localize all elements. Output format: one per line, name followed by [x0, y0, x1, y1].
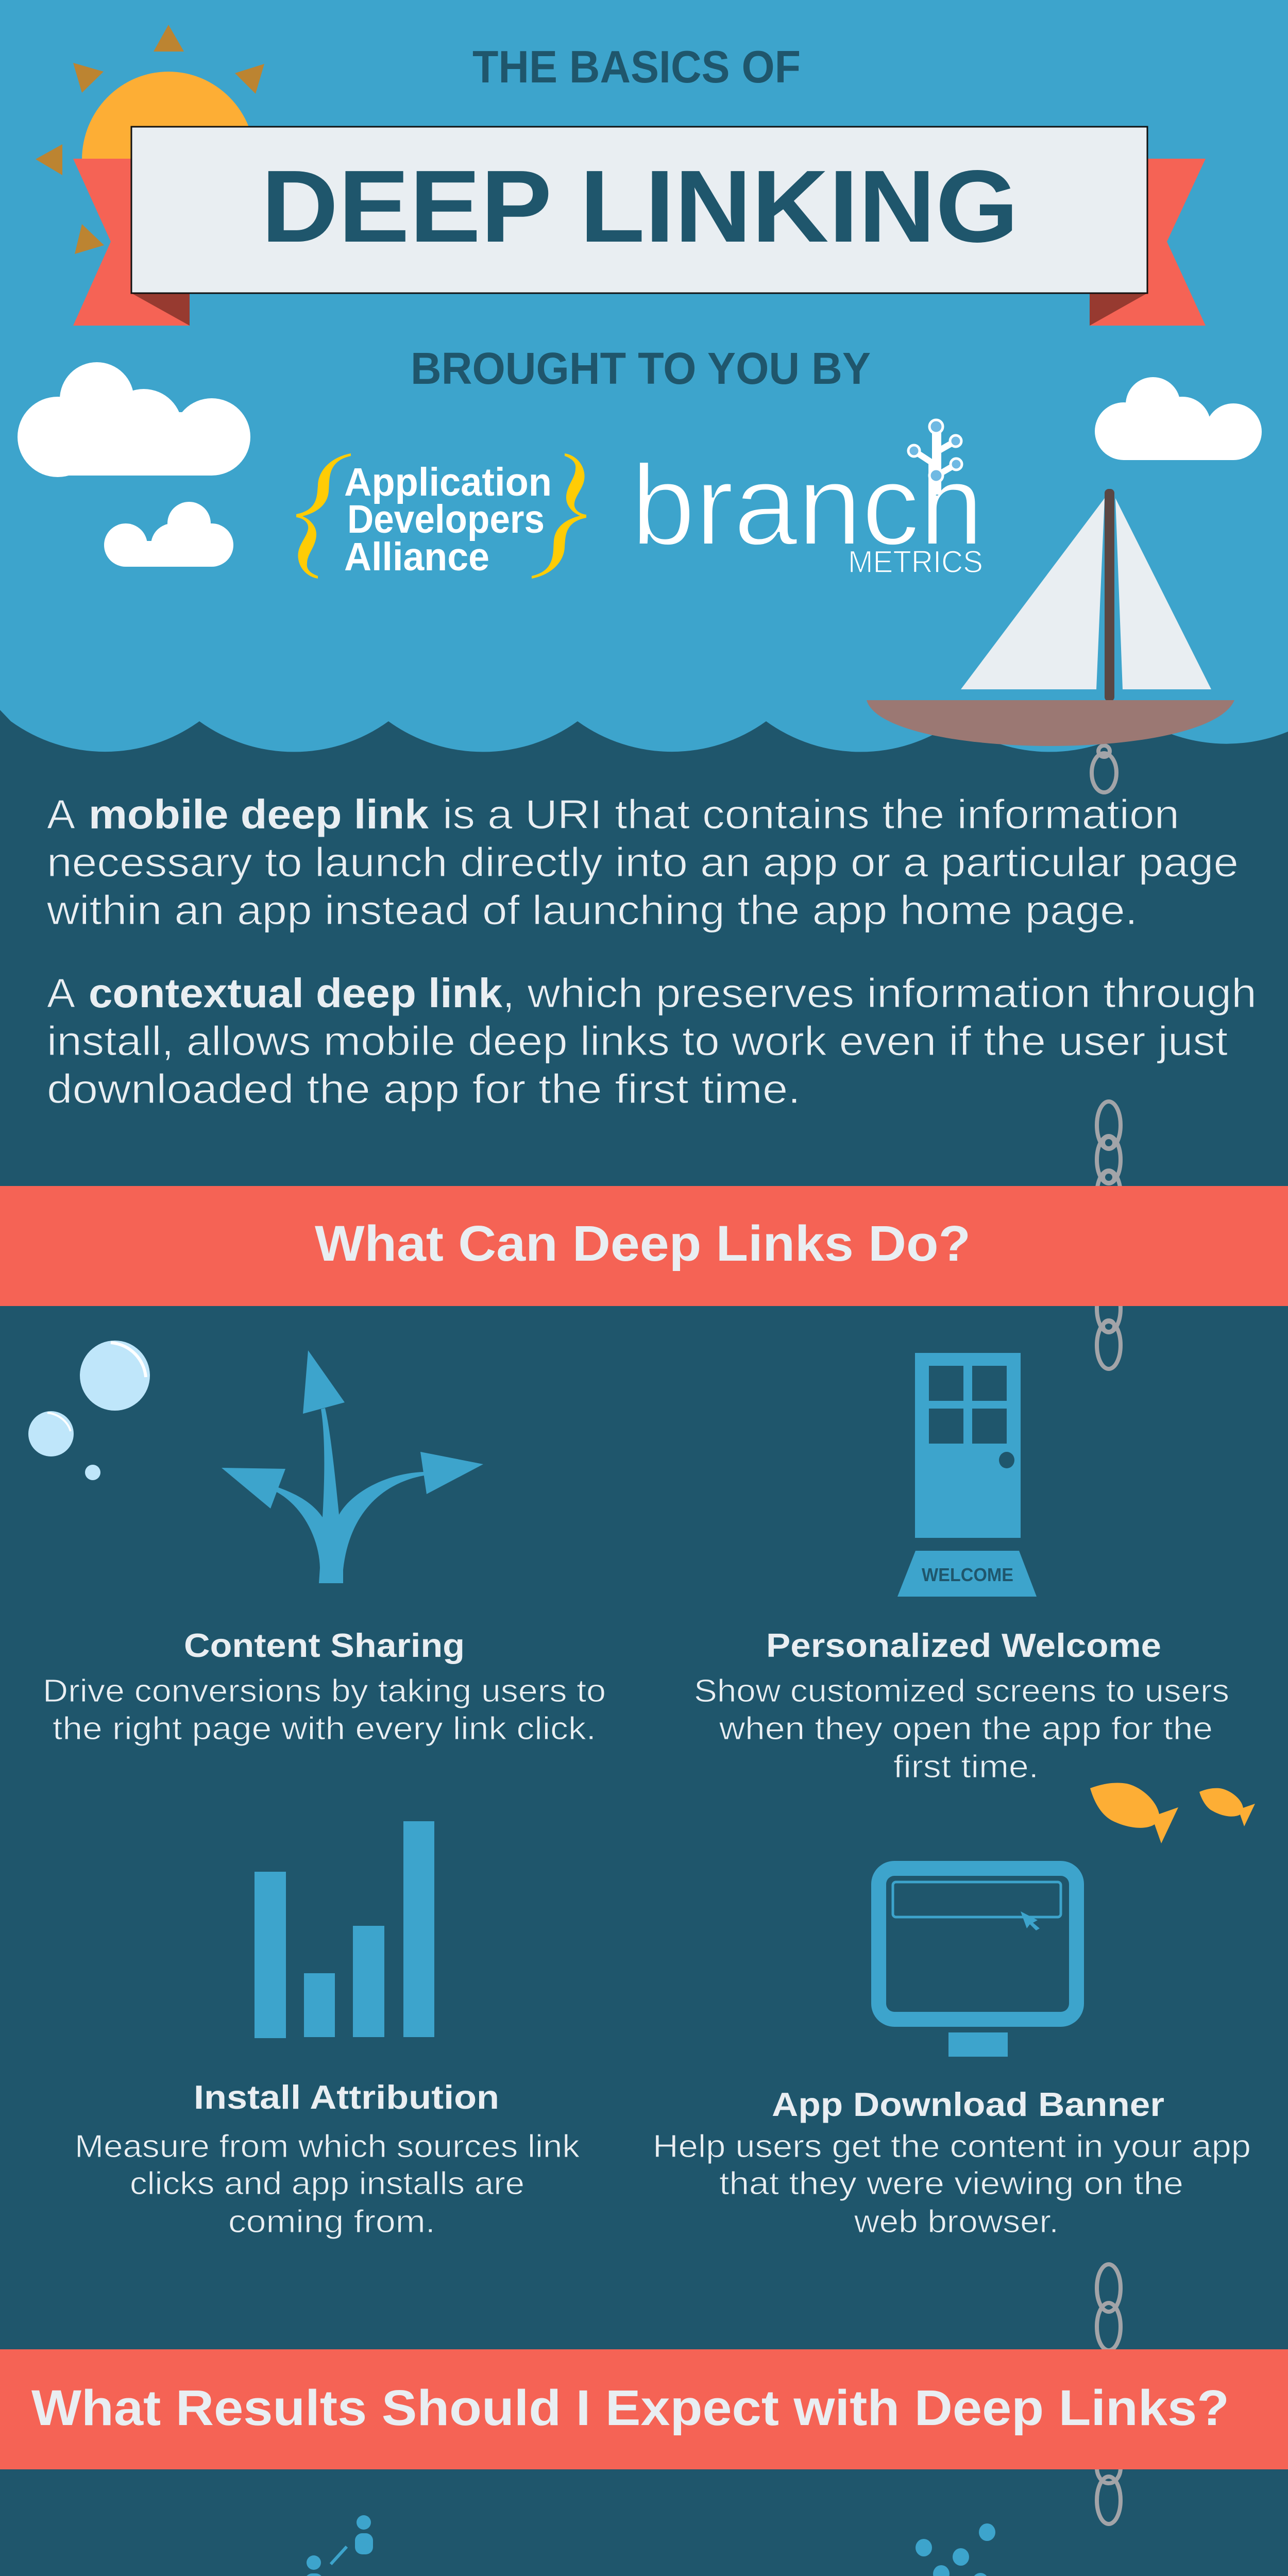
feature: app download banner [653, 2086, 1251, 2240]
cloud: small left [104, 502, 233, 567]
intro text block [46, 791, 1257, 1112]
feature: content sharing [43, 1626, 606, 1747]
cloud: right [1095, 377, 1262, 460]
logo: branch metrics: branch [631, 442, 984, 569]
feature: content sharing: Content Sharing [184, 1626, 465, 1664]
feature: install attribution: Install Attribution [194, 2078, 499, 2116]
intro text block: mobile deep link [89, 791, 429, 837]
feature: content sharing: Drive conversions by taking users to [43, 1673, 606, 1709]
heading: the basics of: THE BASICS OF [472, 41, 801, 92]
feature: personalized welcome: first time. [893, 1749, 1039, 1785]
intro text block: necessary to launch directly into an app or a particular page [47, 839, 1239, 885]
intro text block: A [47, 791, 76, 837]
icon: cup with dollar and bubbles [909, 2523, 1012, 2576]
feature: app download banner: that they were viewing on the [719, 2166, 1183, 2201]
heading: brought to you by: BROUGHT TO YOU BY [411, 344, 871, 394]
intro text block: within an app instead of launching the app home page. [46, 887, 1138, 933]
feature: install attribution: coming from. [228, 2204, 435, 2240]
feature: personalized welcome: Show customized screens to users [694, 1673, 1229, 1709]
icon: people network [256, 2515, 373, 2576]
logo: Application Developers Alliance: Application [344, 460, 552, 504]
feature: personalized welcome [694, 1626, 1229, 1785]
logo: Application Developers Alliance [296, 453, 586, 579]
logo: Application Developers Alliance: Alliance [344, 535, 489, 579]
sailboat [867, 489, 1234, 746]
logo: Application Developers Alliance: Developers [347, 497, 545, 541]
section banner: what results [0, 2349, 1288, 2469]
intro text block: downloaded the app for the first time. [47, 1066, 801, 1112]
section banner: what can deep links do: What Can Deep Links Do? [315, 1215, 971, 1272]
title ribbon [73, 127, 1206, 326]
intro text block: install, allows mobile deep links to work even if the user just [47, 1018, 1228, 1064]
anchor chain under boat [1092, 745, 1116, 792]
intro text block: , which preserves information through [502, 970, 1257, 1016]
chain segment [1097, 2264, 1121, 2524]
section banner: what results: What Results Should I Expect with Deep Links? [31, 2380, 1229, 2436]
feature: install attribution: clicks and app installs are [130, 2166, 524, 2201]
intro text block: A [47, 970, 76, 1016]
title: DEEP LINKING [261, 149, 1019, 264]
icon: branch tree [908, 420, 962, 495]
sky with scalloped waves [0, 0, 1288, 752]
feature: app download banner: web browser. [854, 2204, 1059, 2240]
sun [36, 25, 264, 254]
icon: branching arrows [222, 1350, 483, 1583]
logo: branch metrics: METRICS [848, 545, 983, 579]
icon: orange fish [1090, 1783, 1255, 1843]
feature: personalized welcome: Personalized Welcome [766, 1626, 1161, 1664]
bubbles [28, 1341, 150, 1480]
feature: app download banner: App Download Banner [772, 2086, 1164, 2123]
icon: door with welcome mat: WELCOME [922, 1564, 1013, 1585]
icon: door with welcome mat [897, 1353, 1037, 1597]
feature: personalized welcome: when they open the app for the [719, 1711, 1213, 1747]
cloud: large left [18, 362, 250, 477]
section banner: what can deep links do [0, 1186, 1288, 1306]
intro text block: contextual deep link [89, 970, 503, 1016]
feature: install attribution [75, 2078, 580, 2240]
feature: app download banner: Help users get the content in your app [653, 2129, 1251, 2164]
icon: bar chart [255, 1821, 434, 2038]
chain segment [1097, 1101, 1121, 1369]
icon: monitor with app banner [871, 1861, 1084, 2057]
feature: install attribution: Measure from which sources link [75, 2129, 580, 2164]
intro text block: is a URI that contains the information [443, 791, 1179, 837]
feature: content sharing: the right page with every link click. [53, 1711, 596, 1747]
